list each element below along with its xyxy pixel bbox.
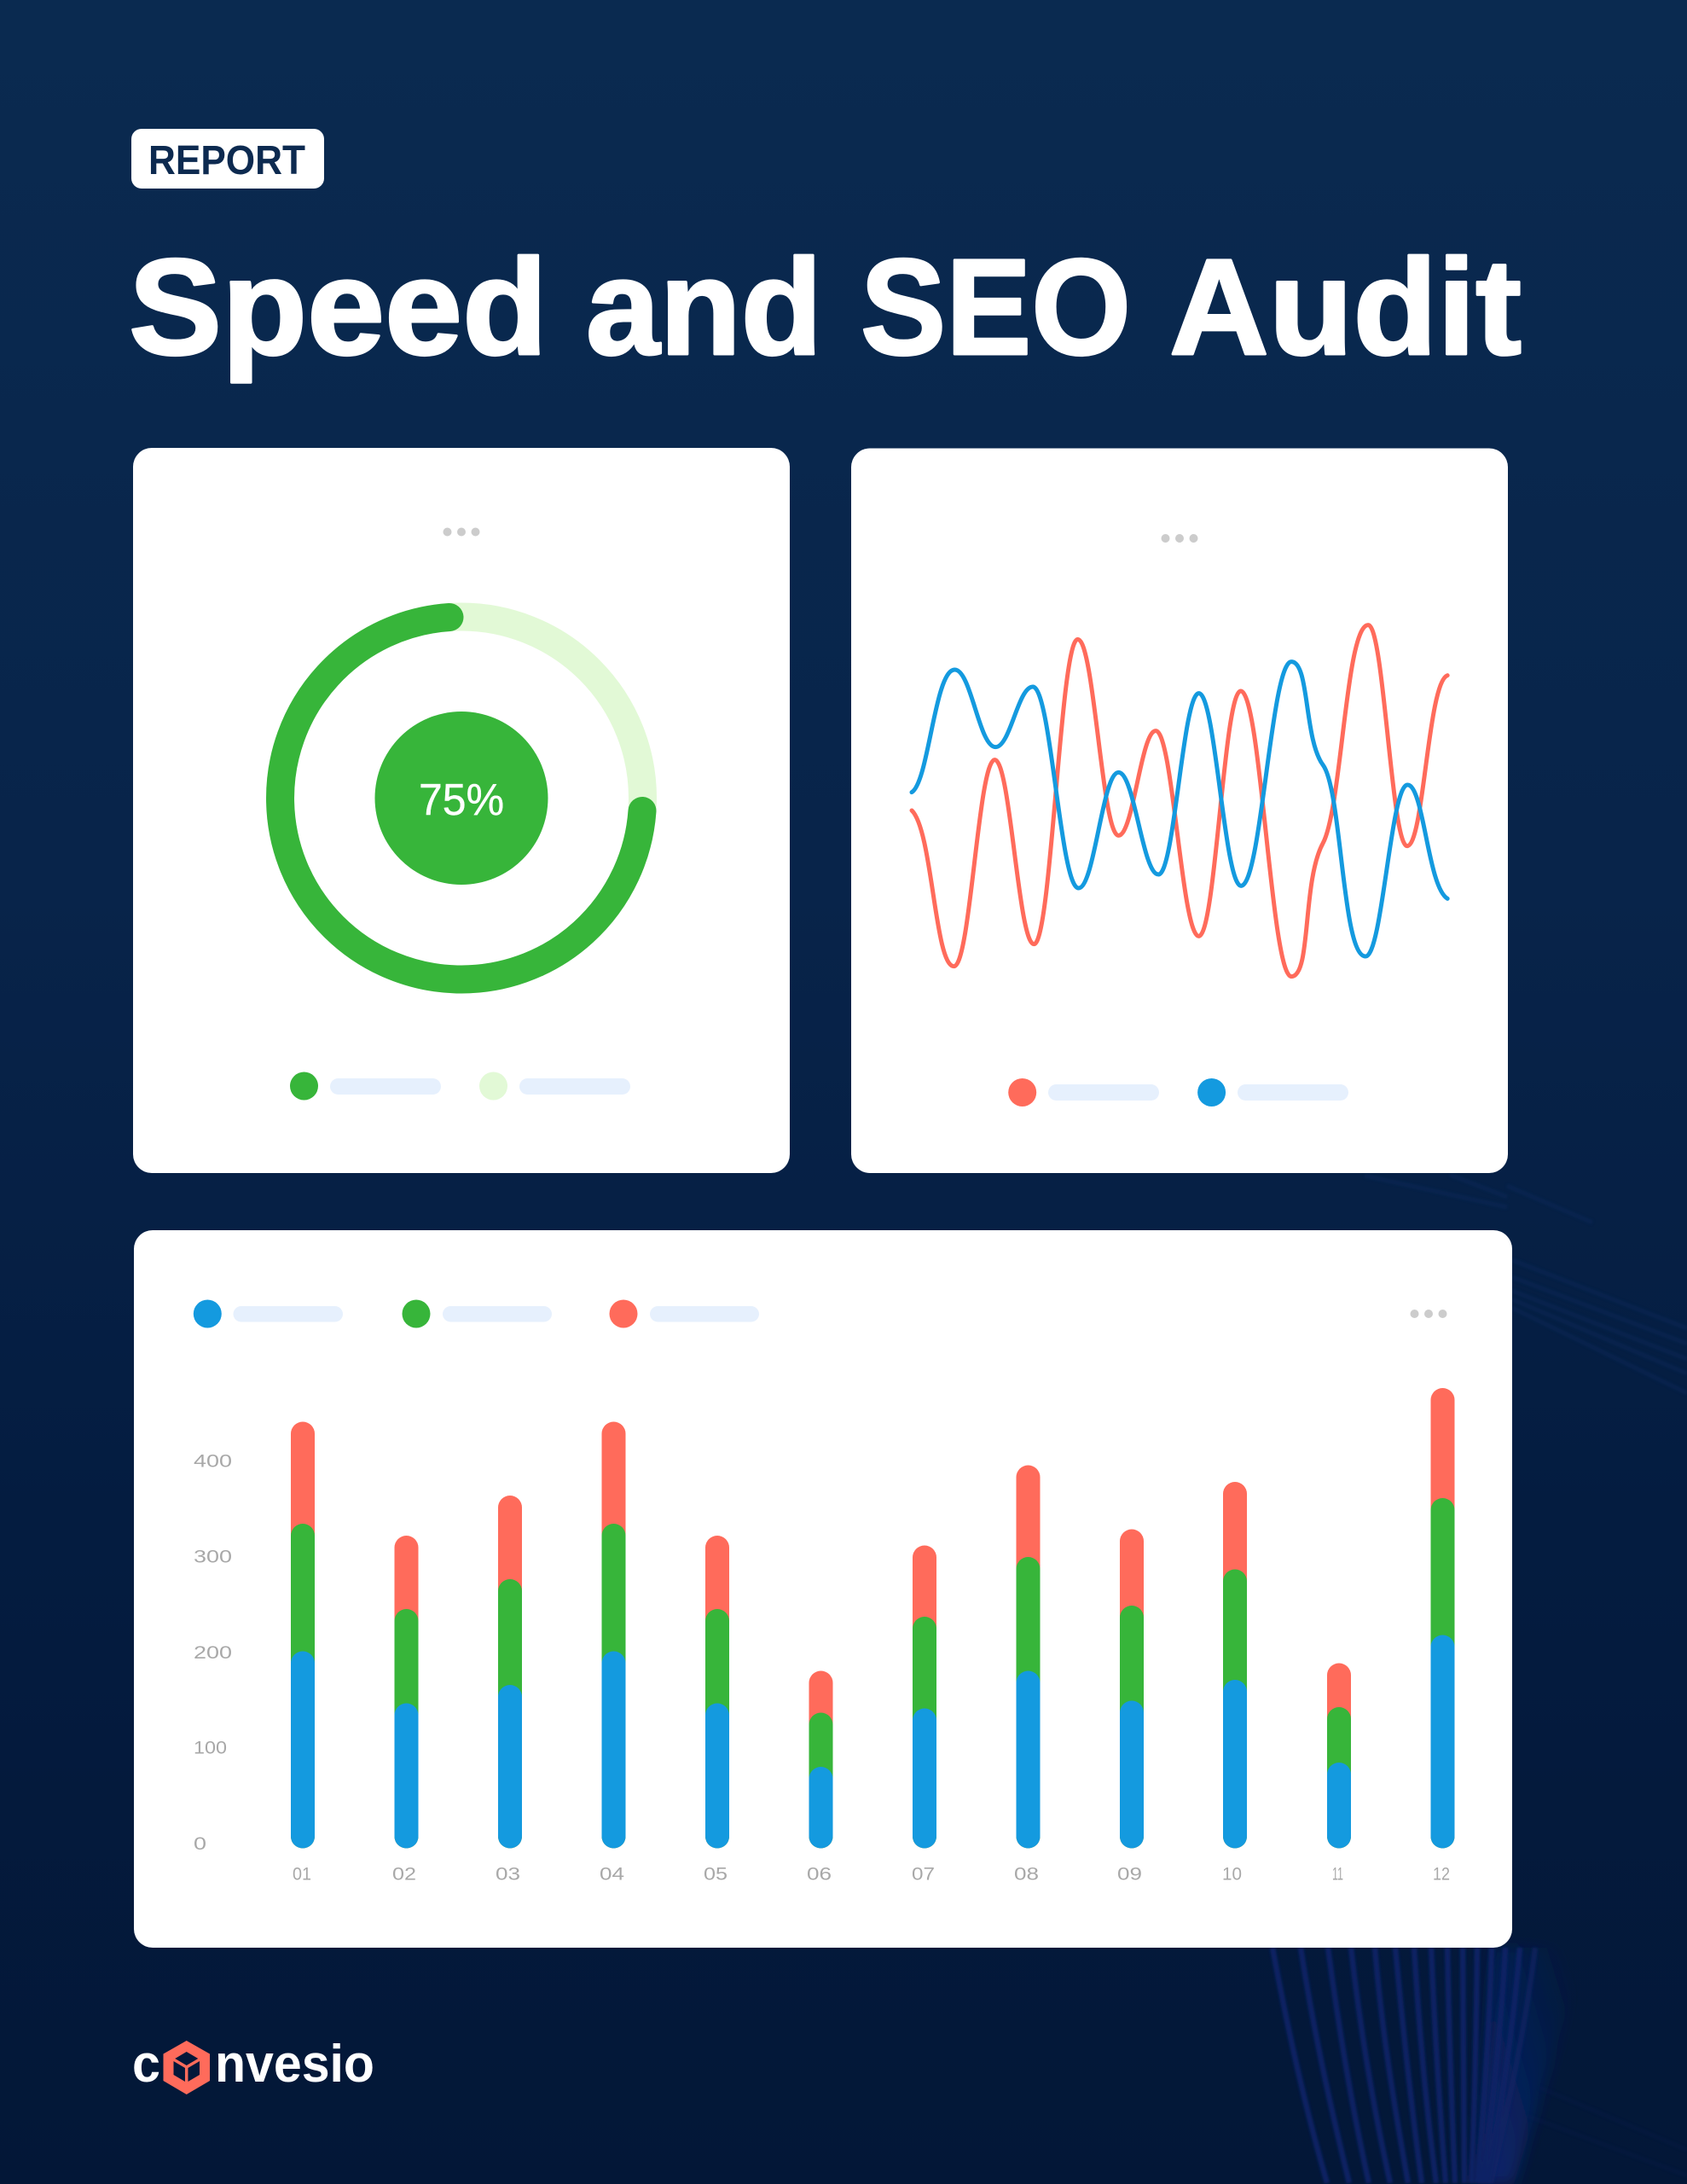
panel: line chart (851, 449, 1508, 1173)
icon: hexagon cube (164, 2041, 210, 2094)
x axis labels: 01 (293, 1865, 311, 1884)
y axis labels: 400 (194, 1452, 232, 1471)
y axis labels: 200 (194, 1643, 232, 1663)
panel: donut chart (133, 448, 790, 1173)
logo: convesio: nvesio (215, 2035, 374, 2094)
x axis labels: 06 (807, 1865, 832, 1884)
badge: REPORT: REPORT (148, 138, 305, 183)
x axis labels: 11 (1332, 1865, 1343, 1884)
x axis labels: 02 (392, 1865, 416, 1884)
x axis labels: 10 (1222, 1865, 1242, 1884)
logo: convesio: c (132, 2035, 160, 2094)
line chart: two series (912, 625, 1447, 977)
icon: menu dots (443, 527, 479, 536)
legend: donut (290, 1072, 630, 1101)
x axis labels: 04 (600, 1865, 624, 1884)
x axis labels: 03 (496, 1865, 520, 1884)
donut chart 75%: 75% (419, 775, 504, 825)
title (129, 230, 1522, 383)
y axis labels: 300 (194, 1548, 232, 1566)
x axis labels: 09 (1117, 1865, 1142, 1884)
title: Audit (1169, 230, 1522, 383)
panel: stacked bar chart (134, 1230, 1512, 1948)
icon: menu dots (1411, 1310, 1446, 1318)
x axis labels: 08 (1014, 1865, 1039, 1884)
legend: lines (1008, 1078, 1348, 1107)
title: and (586, 230, 822, 383)
bars (291, 1388, 1455, 1848)
x axis labels (293, 1865, 1450, 1884)
y axis labels: 0 (194, 1834, 206, 1854)
y axis labels: 100 (194, 1739, 227, 1757)
x axis labels: 07 (912, 1865, 935, 1884)
icon: menu dots (1162, 534, 1197, 543)
donut chart 75% (280, 617, 643, 979)
x axis labels: 12 (1433, 1865, 1450, 1884)
title: SEO (861, 230, 1131, 383)
x axis labels: 05 (704, 1865, 728, 1884)
y axis labels (194, 1452, 232, 1854)
badge: REPORT (131, 129, 324, 189)
title: Speed (129, 230, 548, 383)
logo: convesio (132, 2035, 374, 2094)
legend: bars (194, 1300, 759, 1327)
